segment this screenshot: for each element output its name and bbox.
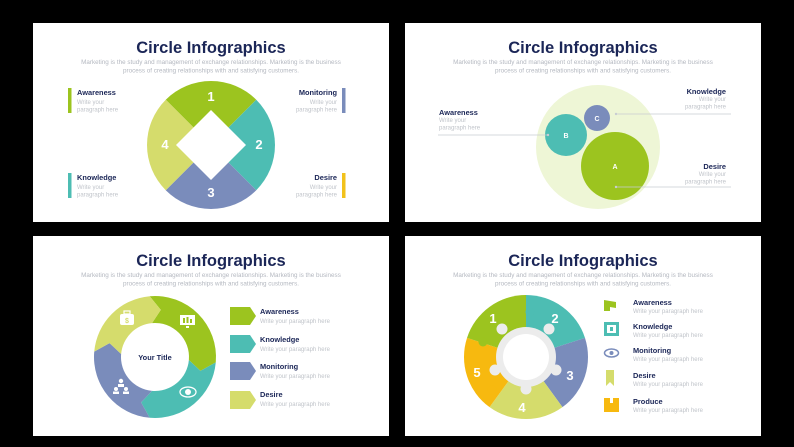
label: Desire: Write your [310, 185, 337, 191]
list item: Knowledge [604, 322, 704, 339]
list item: Knowledge: Knowledge [260, 335, 299, 344]
list item: Awareness: Write your paragraph here [633, 309, 704, 315]
subtitle: process of creating relationships with and satisfying customers. [495, 280, 671, 288]
label: Awareness [68, 88, 119, 114]
label: Monitoring: Write your [310, 100, 337, 106]
list item: Monitoring: Write your paragraph here [633, 357, 704, 363]
subtitle: process of creating relationships with and satisfying customers. [495, 68, 671, 74]
chart: puzzle circle: 1 [489, 311, 497, 326]
list item: Produce: Produce [633, 397, 663, 406]
list item: Desire: Desire [633, 371, 656, 380]
label: Awareness: Awareness [77, 88, 116, 97]
label: Desire: paragraph here [296, 192, 338, 198]
chart: puzzle circle: 2 [551, 311, 559, 326]
chart: bubble circles: A [612, 164, 618, 171]
chart: arrow ring [94, 296, 216, 418]
list item: Awareness: Awareness [633, 298, 672, 307]
list item: Awareness: Write your paragraph here [260, 319, 331, 325]
subtitle: process of creating relationships with and satisfying customers. [123, 280, 299, 288]
chart: bubble circles: B [563, 133, 569, 140]
list item: Desire [230, 390, 331, 409]
callout: Awareness: paragraph here [439, 126, 481, 132]
subtitle: process of creating relationships with and satisfying customers. [123, 68, 299, 74]
list item: Monitoring: Write your paragraph here [260, 374, 331, 380]
title: Circle Infographics [136, 252, 286, 270]
chart: puzzle circle: 5 [473, 365, 481, 380]
icon: people [113, 379, 129, 394]
list item: Monitoring: Monitoring [260, 362, 299, 371]
list item: Awareness: Awareness [260, 307, 299, 316]
chart: bubble circles: C [594, 116, 600, 123]
callout: Knowledge [615, 87, 731, 115]
list item: Produce: Write your paragraph here [633, 408, 704, 414]
list item: Monitoring [604, 346, 704, 363]
label: Monitoring: Monitoring [299, 88, 337, 97]
callout: Knowledge: Write your [699, 97, 726, 103]
callout: Desire: Write your [699, 172, 726, 178]
chart: arrow ring: Your Title [138, 353, 172, 362]
list item: Desire [606, 370, 704, 388]
callout: Knowledge: Knowledge [687, 87, 726, 96]
chart: four segment circle: 3 [207, 185, 215, 200]
callout: Desire: Desire [703, 162, 726, 171]
chart: puzzle circle: 3 [566, 368, 574, 383]
icon: eye [180, 387, 196, 397]
list item: Knowledge: Write your paragraph here [260, 347, 331, 353]
label: Awareness: Write your [77, 100, 104, 106]
subtitle: Marketing is the study and management of exchange relationships. Marketing is the business [453, 59, 713, 66]
panel: puzzle circle [405, 236, 761, 436]
icon: monitor [180, 315, 195, 328]
label: Awareness: paragraph here [77, 108, 119, 114]
list item: Knowledge: Knowledge [633, 322, 672, 331]
label: Knowledge: paragraph here [77, 192, 119, 198]
chart: four segment circle: 1 [207, 89, 215, 104]
label: Knowledge: Write your [77, 185, 104, 191]
chart: bubble circles [536, 85, 660, 209]
title: Circle Infographics [508, 39, 658, 57]
list item: Desire: Write your paragraph here [260, 402, 331, 408]
chart: four segment circle [147, 81, 275, 209]
callout: Awareness [438, 108, 549, 136]
label: Desire [296, 173, 346, 198]
callout: Awareness: Write your [439, 118, 466, 124]
panel: arrow ring [33, 236, 389, 436]
list item: Knowledge [230, 335, 331, 353]
callout: Knowledge: paragraph here [685, 104, 727, 110]
callout: Desire: paragraph here [685, 180, 727, 186]
subtitle: Marketing is the study and management of exchange relationships. Marketing is the business [81, 59, 341, 66]
title: Circle Infographics [136, 39, 286, 57]
panel: nested circles [405, 23, 761, 222]
icon: money bag: $ [125, 318, 129, 325]
list item: Desire: Desire [260, 390, 283, 399]
list item: Monitoring: Monitoring [633, 346, 672, 355]
callout: Desire [615, 162, 731, 188]
label: Monitoring: paragraph here [296, 108, 338, 114]
chart: four segment circle: 4 [161, 137, 169, 152]
list item: Knowledge: Write your paragraph here [633, 333, 704, 339]
chart: puzzle circle: 4 [518, 400, 526, 415]
chart: puzzle circle [464, 295, 588, 419]
label: Monitoring [296, 88, 346, 114]
chart: four segment circle: 2 [255, 137, 263, 152]
list item: Produce [604, 397, 704, 414]
title: Circle Infographics [508, 252, 658, 270]
label: Knowledge: Knowledge [77, 173, 116, 182]
label: Knowledge [68, 173, 119, 198]
list item: Monitoring [230, 362, 331, 380]
panel: four segment circle [33, 23, 389, 222]
list item: Awareness [230, 307, 331, 325]
callout: Awareness: Awareness [439, 108, 478, 117]
list item: Desire: Write your paragraph here [633, 382, 704, 388]
label: Desire: Desire [314, 173, 337, 182]
subtitle: Marketing is the study and management of exchange relationships. Marketing is the business [81, 272, 341, 279]
subtitle: Marketing is the study and management of exchange relationships. Marketing is the business [453, 272, 713, 279]
list item: Awareness [604, 298, 704, 315]
